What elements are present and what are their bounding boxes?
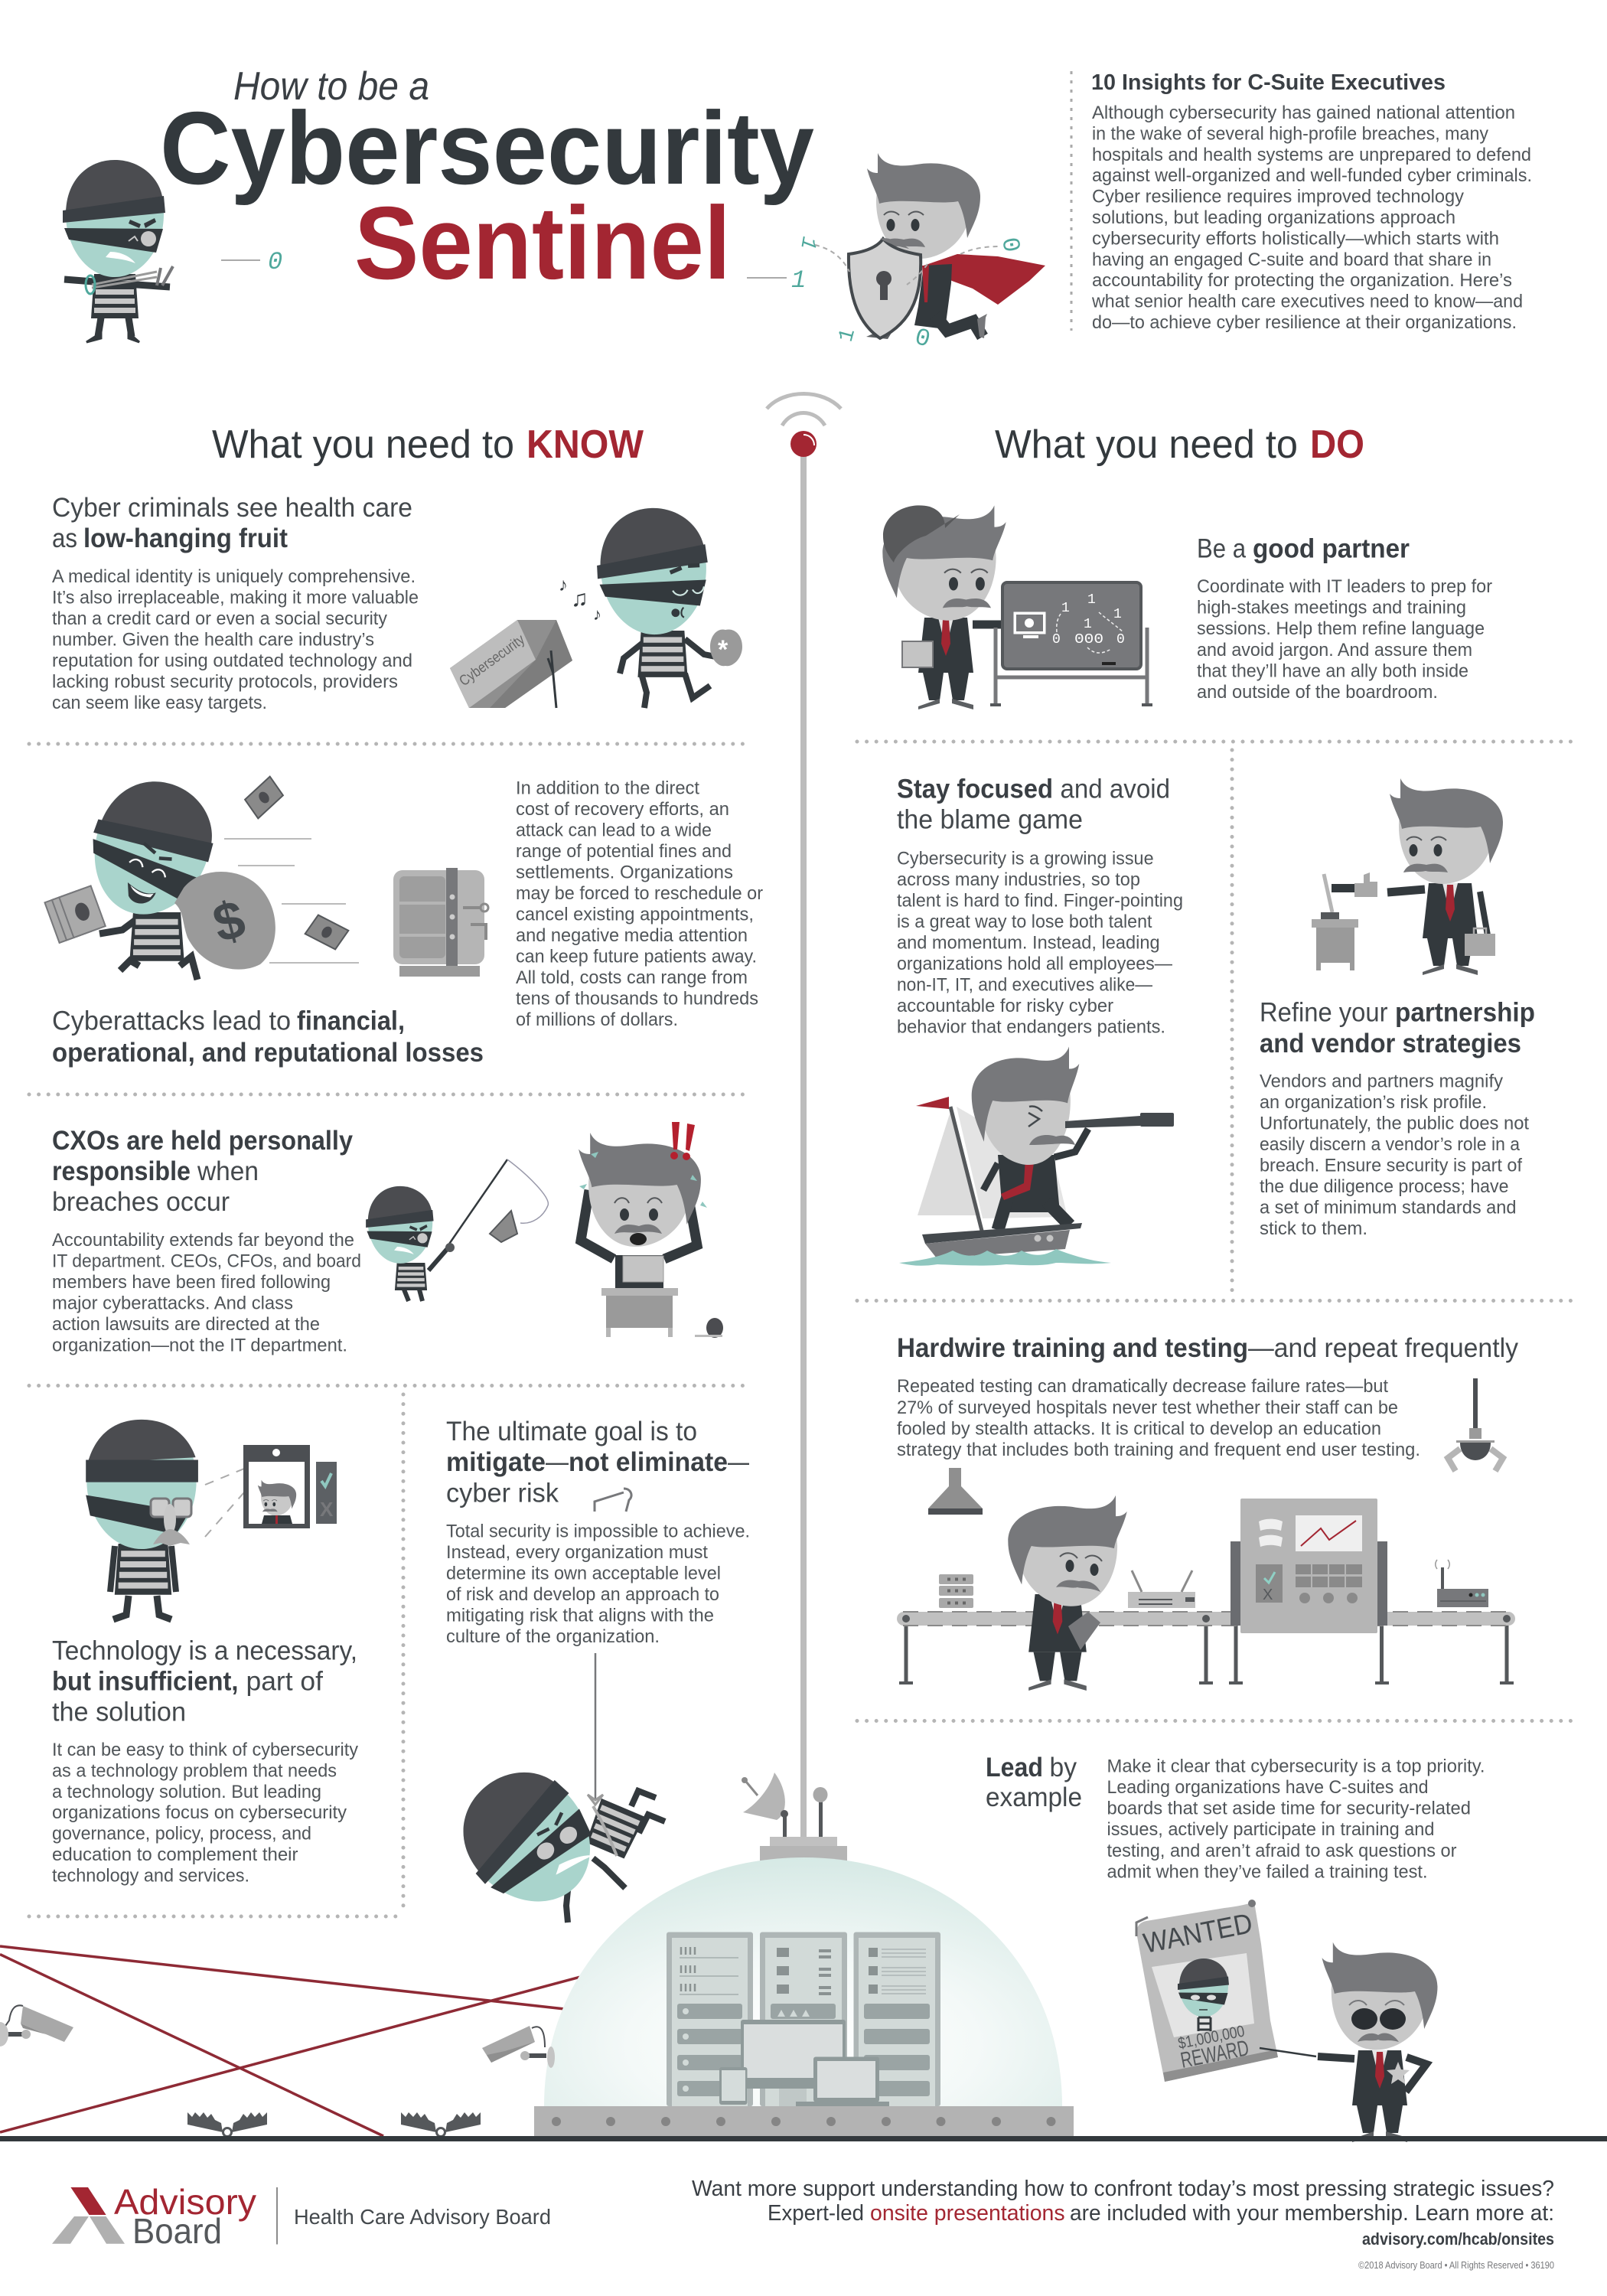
panel body text — [446, 1521, 750, 1647]
panel heading — [52, 493, 412, 553]
icon: server stack on belt — [939, 1574, 973, 1608]
panel body text: organization—not the IT department. — [52, 1335, 347, 1356]
panel body text: across many industries, so top — [897, 869, 1140, 890]
panel body text: Total security is impossible to achieve. — [446, 1521, 750, 1541]
flying bills and speed lines — [224, 777, 359, 963]
panel body text: sessions. Help them refine language — [1197, 618, 1485, 639]
icon: desk — [601, 1288, 678, 1296]
panel body text: members have been fired following — [52, 1272, 331, 1293]
icon: shield with keyhole — [849, 239, 921, 338]
intro body: cybersecurity efforts holistically—which starts with — [1092, 228, 1499, 249]
whiteboard with play diagram: 000 — [1074, 632, 1103, 647]
binary digits with dashes: 1 — [794, 234, 820, 251]
footer call to action: are included with your membership. Learn more at: — [1070, 2201, 1554, 2226]
panel heading: part of — [246, 1667, 323, 1696]
panel: low-hanging fruit — [52, 493, 742, 713]
panel heading: Lead — [986, 1753, 1043, 1782]
panel heading — [52, 1126, 353, 1217]
panel heading: example — [986, 1782, 1082, 1812]
panel body text: as a technology problem that needs — [52, 1760, 337, 1781]
panel body text: can keep future patients away. — [516, 946, 757, 967]
icon: desk with monitor and hand — [1312, 872, 1377, 970]
panel body text: behavior that endangers patients. — [897, 1017, 1165, 1038]
panel heading: the blame game — [897, 805, 1083, 834]
icon: water — [899, 1249, 1111, 1266]
panel body text — [897, 849, 1183, 1038]
panel heading: financial, — [297, 1006, 405, 1036]
illustration: executive on sailboat with telescope — [899, 1046, 1174, 1266]
illustration: thief hanging on rope — [437, 1653, 665, 1930]
panel body text: It’s also irreplaceable, making it more valuable — [52, 588, 419, 608]
icon: spilled coffee cup — [706, 1318, 723, 1338]
panel body text — [1107, 1756, 1485, 1883]
illustration: sheriff executive with pointer — [1260, 1942, 1437, 2142]
panel heading — [52, 1636, 357, 1727]
icon: hook — [595, 1489, 631, 1512]
panel body text: organizations focus on cybersecurity — [52, 1802, 347, 1823]
footer call to action: onsite presentations — [870, 2201, 1065, 2226]
lasers — [0, 1946, 592, 2136]
footer logo: Board — [132, 2211, 222, 2251]
illustration: cybersecurity block propped by stick: Cybersecurity — [457, 631, 528, 690]
panel body text: can seem like easy targets. — [52, 693, 267, 713]
illustration: thief fishing for a wallet — [366, 1159, 548, 1301]
intro body: Although cybersecurity has gained national attention — [1092, 103, 1515, 123]
icon: security camera left — [0, 2005, 73, 2047]
panel body text: Coordinate with IT leaders to prep for — [1197, 576, 1492, 597]
panel heading: but insufficient, — [52, 1667, 239, 1696]
panel body text: talent is hard to find. Finger-pointing — [897, 891, 1183, 912]
icon: wanted poster: $1,000,000 — [1177, 2023, 1246, 2053]
title line: Sentinel: Sentinel — [354, 185, 731, 301]
panel body text: number. Given the health care industry’s — [52, 629, 374, 651]
illustration: running thief with money bag — [44, 765, 275, 980]
icon: open safe — [393, 868, 488, 977]
panel heading: Refine your — [1260, 998, 1388, 1027]
heading: What you need to DO: DO — [1310, 422, 1364, 467]
panel body text: Repeated testing can dramatically decrease failure rates—but — [897, 1376, 1388, 1397]
intro body: solutions, but leading organizations approach — [1092, 207, 1455, 228]
panel body text: education to complement their — [52, 1844, 298, 1865]
footer logo: Health Care Advisory Board — [294, 2205, 551, 2229]
icon: face recognition scanner: X — [320, 1498, 334, 1521]
panel body text: Leading organizations have C-suites and — [1107, 1777, 1428, 1798]
footer call to action — [692, 2177, 1554, 2271]
panel body text: determine its own acceptable level — [446, 1563, 721, 1584]
footer call to action: Expert-led — [768, 2201, 864, 2226]
glass dome — [544, 1857, 1062, 2106]
panel body text: IT department. CEOs, CFOs, and board — [52, 1251, 361, 1272]
icon: testing machine: X — [1263, 1587, 1273, 1603]
panel body text: and momentum. Instead, leading — [897, 933, 1160, 954]
title line: Cybersecurity: Cybersecurity — [160, 90, 814, 206]
panel body text: technology and services. — [52, 1866, 249, 1886]
panel body text: than a credit card or even a social security — [52, 608, 387, 629]
footer logo — [52, 2182, 551, 2251]
illustration: executive hero with shield and cape — [849, 153, 1045, 339]
icon: cash in hand — [44, 885, 106, 943]
icon: wallet on hook — [490, 1211, 517, 1242]
panel heading: breaches occur — [52, 1187, 230, 1217]
panel body text: issues, actively participate in training and — [1107, 1819, 1434, 1840]
panel body text: Unfortunately, the public does not — [1260, 1114, 1529, 1134]
panel body text: an organization’s risk profile. — [1260, 1092, 1487, 1113]
icon: boat — [922, 1223, 1082, 1244]
intro body — [1091, 103, 1532, 333]
server rack left — [667, 1932, 753, 2106]
panel body text: A medical identity is uniquely comprehensive. — [52, 566, 416, 587]
panel body text: governance, policy, process, and — [52, 1824, 311, 1844]
panel: hardwire training and testing — [897, 1333, 1518, 1691]
panel body text — [1197, 576, 1492, 703]
panel body text: tens of thousands to hundreds — [516, 988, 758, 1009]
panel: lead by example — [986, 1753, 1485, 2142]
panel body text: attack can lead to a wide — [516, 820, 712, 840]
panel heading: operational, and reputational losses — [52, 1038, 484, 1068]
heading: What you need to KNOW: What you need to — [212, 422, 514, 467]
divider — [857, 1719, 1579, 1723]
icon: telescope — [1065, 1116, 1140, 1128]
illustration: whistling thief with apple — [594, 505, 742, 708]
illustration: whistling thief with apple: * — [718, 635, 729, 664]
whiteboard with play diagram: 0 — [1052, 632, 1061, 647]
panel body text: range of potential fines and — [516, 841, 732, 862]
panel heading: and avoid — [1061, 775, 1170, 804]
divider — [29, 1093, 750, 1096]
panel body text: Vendors and partners magnify — [1260, 1071, 1503, 1092]
icon: music notes: ♫ — [571, 586, 588, 612]
panel body text: culture of the organization. — [446, 1626, 660, 1647]
panel body text: and negative media attention — [516, 925, 748, 946]
panel heading: —and repeat frequently — [1248, 1333, 1518, 1363]
illustration: disguised thief at face scanner — [86, 1420, 337, 1619]
panel heading: CXOs are held personally — [52, 1126, 353, 1156]
panel: mitigate not eliminate — [437, 1417, 750, 1930]
panel body text: action lawsuits are directed at the — [52, 1314, 320, 1335]
panel heading: The ultimate goal is to — [446, 1417, 697, 1446]
panel body text: high-stakes meetings and training — [1197, 598, 1466, 618]
icon: wanted poster: REWARD — [1178, 2036, 1251, 2073]
panel heading: as — [52, 523, 77, 553]
panel body text: of millions of dollars. — [516, 1009, 678, 1030]
icon: flag — [916, 1097, 949, 1109]
icon: antenna — [813, 1787, 828, 1838]
title line: How to be a: How to be a — [233, 64, 429, 109]
icon: red exclamation marks — [672, 1122, 680, 1150]
panel: partnership and vendor strategies — [1260, 778, 1535, 1239]
panel heading: low-hanging fruit — [83, 523, 288, 553]
dome roof steps — [760, 1837, 847, 1861]
panel body text: fooled by stealth attacks. It is critical to develop an education — [897, 1419, 1381, 1439]
icon: testing machine — [1231, 1499, 1387, 1633]
intro body: hospitals and health systems are unprepared to defend — [1092, 145, 1531, 165]
illustration: executive with clipboard on line — [1008, 1495, 1127, 1691]
panel heading: mitigate — [446, 1447, 546, 1477]
binary digits with dashes: 1 — [791, 266, 806, 295]
heading: What you need to DO: What you need to — [995, 422, 1298, 467]
footer logo: Advisory — [114, 2182, 256, 2222]
icon: wifi arcs — [767, 393, 841, 426]
icon: machine hood — [928, 1468, 983, 1515]
panel heading: Cyber criminals see health care — [52, 493, 412, 523]
panel heading — [446, 1417, 749, 1508]
panel body text: major cyberattacks. And class — [52, 1293, 293, 1313]
whiteboard with play diagram: 0 — [1116, 632, 1125, 647]
panel body text: is a great way to lose both talent — [897, 912, 1152, 932]
icon: monitor — [741, 2020, 846, 2106]
panel heading: when — [197, 1156, 259, 1186]
panel body text: lacking robust security protocols, providers — [52, 672, 398, 692]
divider — [857, 1299, 1579, 1303]
icon: wifi router on belt — [1436, 1560, 1488, 1607]
panel heading: Stay focused — [897, 775, 1053, 804]
dome with servers — [534, 1773, 1074, 2137]
icon: music notes — [559, 575, 601, 624]
panel heading: Be a — [1197, 534, 1246, 563]
icon: tablet — [719, 2067, 747, 2105]
icon: wanted poster — [1136, 1900, 1278, 2082]
footer call to action: Want more support understanding how to confront today’s most pressing strategic issues? — [692, 2177, 1554, 2201]
binary digits with dashes: 0 — [911, 323, 934, 354]
panel body text: and avoid jargon. And assure them — [1197, 640, 1472, 660]
panel body text: of risk and develop an approach to — [446, 1584, 719, 1605]
panel body text: organizations hold all employees— — [897, 954, 1172, 974]
server rack right — [854, 1932, 940, 2106]
panel body text: testing, and aren’t afraid to ask questions or — [1107, 1841, 1457, 1861]
sweat drops — [579, 1152, 707, 1208]
panel body text — [52, 1740, 358, 1886]
panel: technology necessary but insufficient — [52, 1420, 358, 1886]
whiteboard with play diagram — [990, 582, 1152, 705]
binary digits with dashes: 0 — [268, 248, 282, 276]
intro body: accountability for protecting the organization. Here’s — [1092, 270, 1512, 291]
panel body text: reputation for using outdated technology and — [52, 651, 412, 671]
icon: face recognition scanner — [243, 1445, 337, 1528]
divider — [857, 739, 1579, 744]
server rack middle — [760, 1932, 847, 2106]
panel body text: Cybersecurity is a growing issue — [897, 849, 1154, 869]
panel heading: cyber risk — [446, 1479, 559, 1508]
panel: CXOs personally responsible — [52, 1122, 723, 1356]
binary digits with dashes: 0 — [995, 235, 1025, 255]
panel body text — [897, 1376, 1420, 1460]
panel heading: by — [1050, 1753, 1077, 1782]
whiteboard with play diagram: 1 — [1113, 607, 1122, 622]
panel body text: breach. Ensure security is part of — [1260, 1156, 1522, 1176]
dome base — [534, 2106, 1074, 2137]
divider — [29, 742, 750, 745]
panel heading: — — [546, 1447, 569, 1477]
panel body text: accountable for risky cyber — [897, 996, 1113, 1016]
icon: sheriff star — [1387, 2062, 1410, 2084]
icon: sails — [918, 1107, 980, 1215]
panel body text: boards that set aside time for security-related — [1107, 1799, 1471, 1818]
panel heading — [1260, 998, 1535, 1058]
divider: header vertical — [1070, 71, 1073, 331]
icon: bear trap right — [401, 2112, 481, 2137]
icon: music notes: ♪ — [593, 605, 601, 624]
panel body text: easily discern a vendor’s role in a — [1260, 1134, 1521, 1155]
panel heading: Hardwire training and testing — [897, 1333, 1248, 1363]
panel body text: strategy that includes both training and frequent end user testing. — [897, 1440, 1420, 1460]
panel body text: stick to them. — [1260, 1218, 1367, 1239]
panel body text: All told, costs can range from — [516, 967, 748, 988]
icon: bear trap left — [187, 2112, 267, 2137]
icon: laptop — [796, 2057, 889, 2106]
panel body text: admit when they’ve failed a training test. — [1107, 1862, 1428, 1883]
panel body text: a technology solution. But leading — [52, 1782, 321, 1802]
panel heading: — — [728, 1447, 749, 1477]
panel body text: settlements. Organizations — [516, 862, 733, 882]
footer url: advisory.com/hcab/onsites — [1362, 2229, 1554, 2249]
panel: financial, operational, reputational losses — [44, 765, 763, 1068]
panel heading — [897, 1333, 1518, 1363]
panel: stay focused — [897, 775, 1183, 1266]
whiteboard with play diagram: 1 — [1087, 592, 1096, 608]
icon: logo mark — [52, 2187, 125, 2244]
illustration: thief with slingshot — [63, 160, 173, 342]
intro body: against well-organized and well-funded cyber criminals. — [1092, 165, 1532, 186]
intro body: what senior health care executives need to know—and — [1091, 292, 1523, 312]
panel body text — [1260, 1071, 1529, 1239]
illustration: executive shakes hand through computer — [1312, 778, 1503, 975]
illustration: alarmed executive at desk — [579, 1122, 723, 1338]
icon: music notes: ♪ — [559, 575, 568, 595]
icon: security camera right — [482, 2026, 555, 2068]
icon: apple — [710, 629, 742, 666]
intro body: in the wake of several high-profile breaches, many — [1092, 123, 1488, 144]
panel body text: a set of minimum standards and — [1260, 1197, 1517, 1218]
ground line — [0, 2136, 1607, 2141]
icon: conveyor belt — [897, 1612, 1515, 1683]
copyright: ©2018 Advisory Board • All Rights Reserved • 36190 — [1358, 2259, 1554, 2271]
intro body: Cyber resilience requires improved technology — [1092, 187, 1464, 207]
panel heading: responsible — [52, 1156, 191, 1186]
panel heading: Technology is a necessary, — [52, 1636, 357, 1665]
panel body text: the due diligence process; have — [1260, 1176, 1509, 1197]
binary digits with dashes: 1 — [835, 326, 861, 344]
icon: money bag — [174, 872, 275, 970]
binary digits with dashes — [221, 234, 1025, 354]
panel: be a good partner — [882, 505, 1492, 709]
icon: robotic claw — [1448, 1378, 1503, 1471]
panel heading: good partner — [1253, 534, 1410, 563]
illustration: executive as coach at whiteboard — [882, 505, 1152, 709]
heading: What you need to KNOW: KNOW — [526, 422, 644, 467]
intro body: having an engaged C-suite and board that share in — [1092, 249, 1491, 270]
icon: red cape — [924, 254, 1045, 305]
icon: wanted poster: WANTED — [1141, 1907, 1255, 1959]
panel body text: 27% of surveyed hospitals never test whether their staff can be — [897, 1397, 1398, 1418]
icon: fake glasses, nose and moustache — [151, 1499, 191, 1546]
panel body text: Accountability extends far beyond the — [52, 1230, 354, 1251]
panel body text — [516, 778, 763, 1030]
panel body text — [52, 566, 419, 713]
illustration: cybersecurity block propped by stick — [450, 620, 572, 708]
panel heading: not eliminate — [569, 1447, 728, 1477]
icon: cap — [883, 505, 960, 563]
central pole with wifi signal — [767, 393, 841, 1838]
panel body text: may be forced to reschedule or — [516, 883, 763, 904]
panel body text: Instead, every organization must — [446, 1542, 708, 1563]
illustration: running thief with money bag: $ — [207, 889, 251, 954]
panel heading: the solution — [52, 1698, 186, 1727]
intro body: do—to achieve cyber resilience at their organizations. — [1092, 312, 1517, 333]
panel body text: that they’ll have an ally both inside — [1197, 661, 1468, 681]
panel heading — [52, 1006, 484, 1068]
intro text block — [1091, 70, 1532, 333]
panel body text: It can be easy to think of cybersecurity — [52, 1740, 358, 1760]
panel heading: and vendor strategies — [1260, 1029, 1521, 1058]
panel heading — [986, 1753, 1082, 1812]
panel body text: non-IT, IT, and executives alike— — [897, 975, 1152, 996]
panel body text: cancel existing appointments, — [516, 904, 754, 925]
divider — [29, 1384, 750, 1388]
panel heading: partnership — [1395, 998, 1535, 1027]
panel body text: Make it clear that cybersecurity is a top priority. — [1107, 1756, 1485, 1777]
whiteboard with play diagram: 1 — [1061, 601, 1070, 616]
whiteboard with play diagram: 1 — [1084, 617, 1092, 632]
icon: briefcase — [1465, 934, 1495, 956]
header: title — [160, 64, 814, 301]
panel heading — [897, 775, 1170, 834]
panel body text: and outside of the boardroom. — [1197, 682, 1438, 703]
panel heading: Cyberattacks lead to — [52, 1006, 291, 1036]
panel body text: cost of recovery efforts, an — [516, 799, 729, 820]
panel body text: mitigating risk that aligns with the — [446, 1606, 714, 1626]
icon: satellite dish — [742, 1773, 788, 1838]
panel body text — [52, 1230, 361, 1356]
intro heading: 10 Insights for C-Suite Executives — [1091, 70, 1446, 95]
panel body text: In addition to the direct — [516, 778, 699, 798]
icon: laptop — [623, 1256, 663, 1282]
icon: router on belt — [1128, 1570, 1195, 1608]
